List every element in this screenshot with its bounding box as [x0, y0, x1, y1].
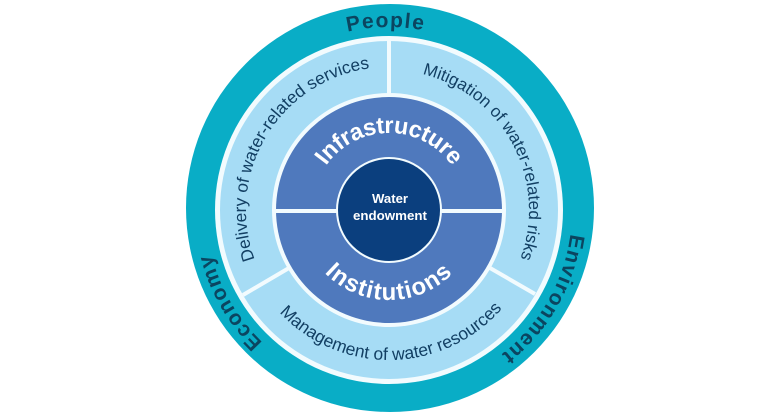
- centre circle: water endowment: Water: [372, 191, 408, 206]
- inner label: Institutions: Institutions: [326, 262, 450, 300]
- white separator ring: [215, 36, 563, 384]
- middle ring: three water management segments: [220, 40, 558, 379]
- white separator around inner disc: [272, 93, 506, 327]
- label: Environment: Environment: [502, 235, 585, 364]
- centre circle: water endowment: [336, 157, 442, 263]
- segment label: delivery of services: Delivery of water-related services: [235, 60, 369, 262]
- inner disc: infrastructure and institutions: [276, 97, 502, 323]
- label: People: People: [346, 12, 424, 32]
- centre circle: water endowment: endowment: [353, 208, 428, 223]
- segment label: management of resources: Management of water resources: [280, 304, 501, 360]
- outer ring: people, environment, economy: [186, 4, 594, 412]
- segment label: mitigation of risks: Mitigation of water-related risks: [424, 63, 542, 260]
- inner label: Infrastructure: Infrastructure: [314, 118, 460, 164]
- label: Economy: Economy: [200, 258, 262, 352]
